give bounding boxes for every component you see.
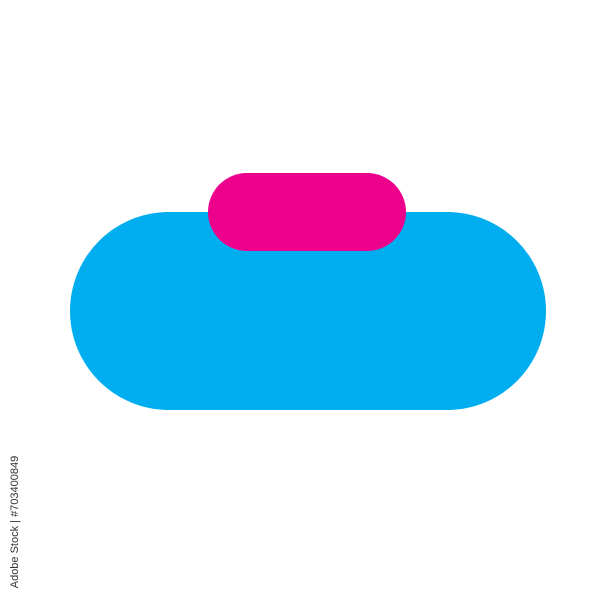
- stock id text: Adobe Stock | #703400849: [9, 456, 21, 588]
- shape: blue rounded bar: [70, 212, 546, 410]
- shape: magenta tab: [208, 173, 406, 251]
